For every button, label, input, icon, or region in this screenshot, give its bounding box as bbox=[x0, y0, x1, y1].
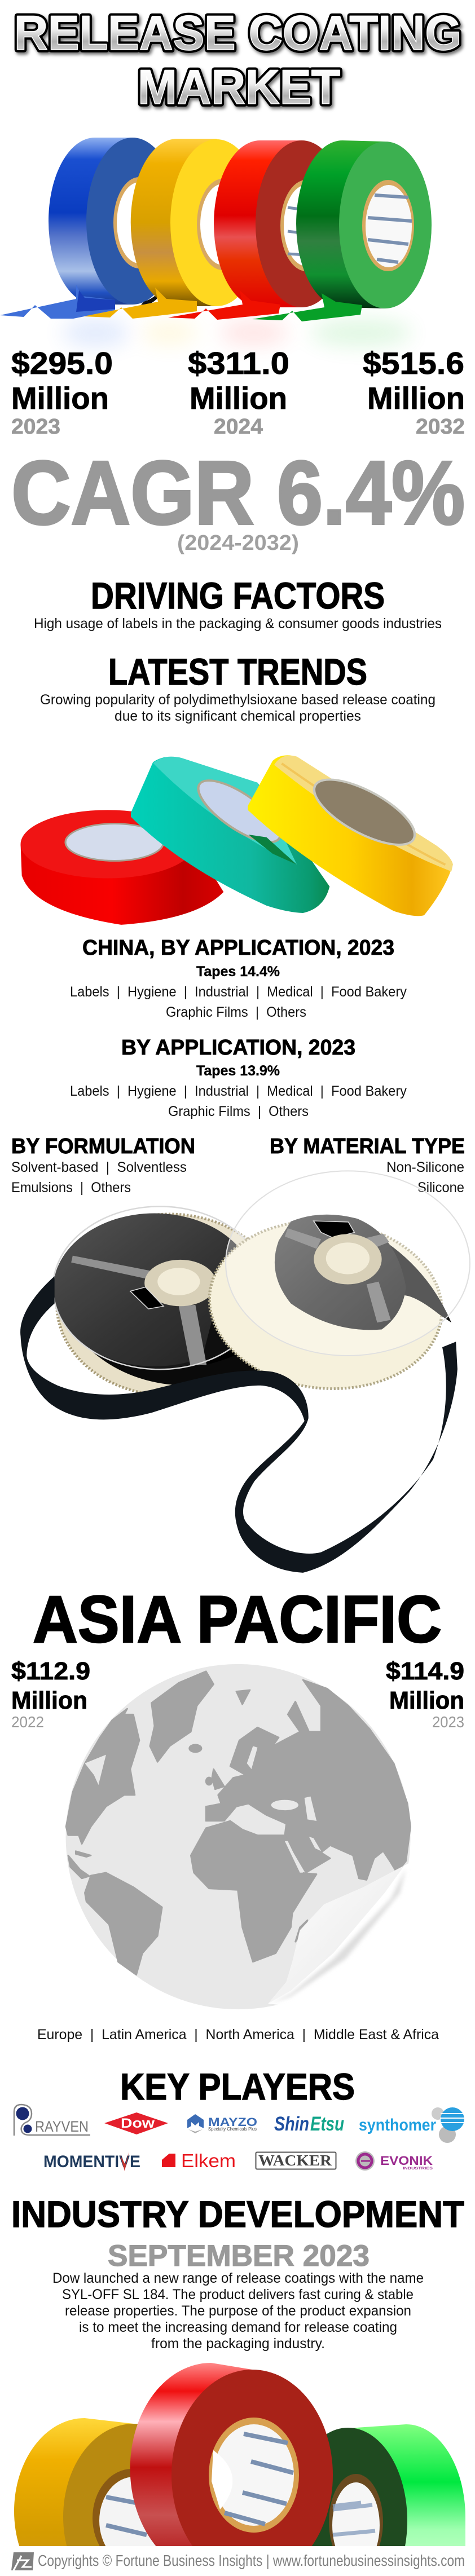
logo: Dow bbox=[104, 2112, 168, 2134]
image: three stacked tape rolls bbox=[21, 755, 453, 925]
China by application: Labels | Hygiene | Industrial | Medical | Food Bakery bbox=[70, 984, 407, 1000]
stat: 2023 market size: 2023 bbox=[11, 415, 60, 439]
by material type bbox=[270, 1135, 465, 1196]
logo: Evonik bbox=[355, 2151, 433, 2171]
by formulation bbox=[11, 1135, 195, 1196]
stat: 2032 market size: $515.6 bbox=[363, 346, 464, 381]
logo: Synthomer: synthomer bbox=[359, 2116, 436, 2134]
stat: 2023 market size: Million bbox=[11, 381, 109, 416]
stat: 2023 market size: $295.0 bbox=[11, 346, 113, 381]
development description: release properties. The purpose of the product expansion bbox=[65, 2303, 411, 2319]
logo: Synthomer bbox=[359, 2107, 464, 2143]
logo: Mayzo: MAYZO bbox=[208, 2116, 257, 2129]
logo: Mayzo: Specialty Chemicals Plus bbox=[208, 2127, 257, 2132]
stat: 2024 market size: $311.0 bbox=[188, 346, 289, 381]
logo: Evonik: INDUSTRIES bbox=[403, 2167, 433, 2171]
stat: Asia Pacific 2023: 2023 bbox=[432, 1713, 464, 1731]
blue roll bbox=[0, 138, 179, 319]
stat: 2024 market size: 2024 bbox=[214, 415, 263, 439]
footer logo bbox=[11, 2552, 34, 2570]
latest trends: LATEST TRENDS bbox=[108, 651, 367, 692]
global by application: Tapes 13.9% bbox=[196, 1063, 280, 1079]
driving factors: DRIVING FACTORS bbox=[91, 575, 385, 616]
stat: 2032 market size: 2032 bbox=[416, 415, 465, 439]
by material type: Non-Silicone bbox=[386, 1159, 464, 1175]
driving factors: High usage of labels in the packaging & consumer goods industries bbox=[34, 616, 442, 632]
logo: Evonik: EVONIK bbox=[380, 2154, 433, 2168]
right reel bbox=[197, 1171, 470, 1402]
latest trends: Growing popularity of polydimethylsioxane based release coating bbox=[40, 692, 436, 708]
left reel bbox=[53, 1206, 282, 1396]
yellow roll bbox=[14, 2418, 156, 2546]
stat: Asia Pacific 2022: $112.9 bbox=[11, 1657, 90, 1685]
global by application: Graphic Films | Others bbox=[168, 1104, 309, 1119]
global by application: Labels | Hygiene | Industrial | Medical | Food Bakery bbox=[70, 1083, 407, 1099]
title: MARKET bbox=[138, 60, 340, 114]
logo: Shin-Etsu: Etsu bbox=[310, 2113, 344, 2135]
stat: Asia Pacific 2023: $114.9 bbox=[386, 1657, 464, 1685]
stat: 2032 market size: Million bbox=[367, 381, 465, 416]
China by application: Tapes 14.4% bbox=[196, 964, 280, 980]
stat: 2023 market size bbox=[11, 346, 113, 439]
latest trends bbox=[40, 651, 436, 724]
globe with peeling corner bbox=[66, 1664, 424, 2011]
logo: Momentive: MOMENTIVE bbox=[43, 2152, 140, 2171]
stat: Asia Pacific 2022: 2022 bbox=[11, 1713, 44, 1731]
development description: is to meet the increasing demand for release coating bbox=[79, 2319, 397, 2335]
green roll bbox=[252, 140, 432, 321]
date: SEPTEMBER 2023 bbox=[108, 2239, 370, 2273]
development description bbox=[52, 2270, 424, 2352]
image: bottom tape rolls bbox=[14, 2363, 465, 2546]
logo: Wacker: WACKER bbox=[258, 2152, 332, 2169]
development description: Dow launched a new range of release coatings with the name bbox=[52, 2270, 424, 2286]
development description: SYL-OFF SL 184. The product delivers fast curing & stable bbox=[62, 2287, 414, 2302]
by formulation: BY FORMULATION bbox=[11, 1135, 195, 1158]
key players heading: KEY PLAYERS bbox=[120, 2066, 355, 2107]
green roll bbox=[311, 2424, 465, 2546]
by formulation: Emulsions | Others bbox=[11, 1180, 131, 1196]
film ribbon bbox=[20, 1276, 458, 1573]
stat: 2024 market size bbox=[188, 346, 289, 439]
logo: Elkem bbox=[162, 2150, 236, 2171]
title: RELEASE COATING bbox=[14, 6, 461, 60]
logo: Shin-Etsu: Shin bbox=[274, 2113, 309, 2135]
latest trends: due to its significant chemical properties bbox=[115, 708, 361, 724]
China by application bbox=[70, 936, 407, 1020]
China by application: CHINA, BY APPLICATION, 2023 bbox=[82, 936, 394, 960]
title: MARKET bbox=[138, 60, 340, 114]
Asia Pacific heading: ASIA PACIFIC bbox=[33, 1582, 442, 1657]
logo: Shin-Etsu bbox=[274, 2113, 344, 2135]
red roll bbox=[168, 140, 348, 320]
title: RELEASE COATING bbox=[14, 6, 461, 60]
stat: 2024 market size: Million bbox=[190, 381, 287, 416]
yellow roll bbox=[83, 139, 263, 319]
by formulation: Solvent-based | Solventless bbox=[11, 1159, 187, 1175]
logos row 2 bbox=[43, 2150, 433, 2171]
logo: Elkem: Elkem bbox=[181, 2150, 236, 2171]
global by application: BY APPLICATION, 2023 bbox=[121, 1036, 355, 1060]
development description: from the packaging industry. bbox=[151, 2336, 325, 2352]
other regions: Europe | Latin America | North America | Middle East & Africa bbox=[37, 2027, 439, 2043]
stat: Asia Pacific 2023 bbox=[386, 1657, 464, 1731]
global by application bbox=[70, 1036, 407, 1119]
title bbox=[14, 6, 461, 114]
by material type: Silicone bbox=[417, 1180, 464, 1196]
logo: Rayven bbox=[14, 2105, 90, 2136]
red roll bbox=[130, 2363, 333, 2546]
driving factors bbox=[34, 575, 442, 632]
logo: Mayzo bbox=[187, 2114, 257, 2133]
China by application: Graphic Films | Others bbox=[166, 1004, 306, 1020]
hero image: four colored tape rolls bbox=[0, 138, 432, 346]
stat: Asia Pacific 2022 bbox=[11, 1657, 90, 1731]
by material type: BY MATERIAL TYPE bbox=[270, 1135, 465, 1158]
stat: 2032 market size bbox=[363, 346, 465, 439]
image: film reels with ribbon bbox=[20, 1171, 470, 1573]
logo: Rayven: RAYVEN bbox=[35, 2118, 89, 2135]
logo: Dow: Dow bbox=[121, 2116, 155, 2131]
stat: Asia Pacific 2023: Million bbox=[389, 1687, 464, 1714]
CAGR callout: (2024-2032) bbox=[177, 531, 299, 555]
logos row 1 bbox=[14, 2105, 464, 2143]
stat: Asia Pacific 2022: Million bbox=[11, 1687, 87, 1714]
